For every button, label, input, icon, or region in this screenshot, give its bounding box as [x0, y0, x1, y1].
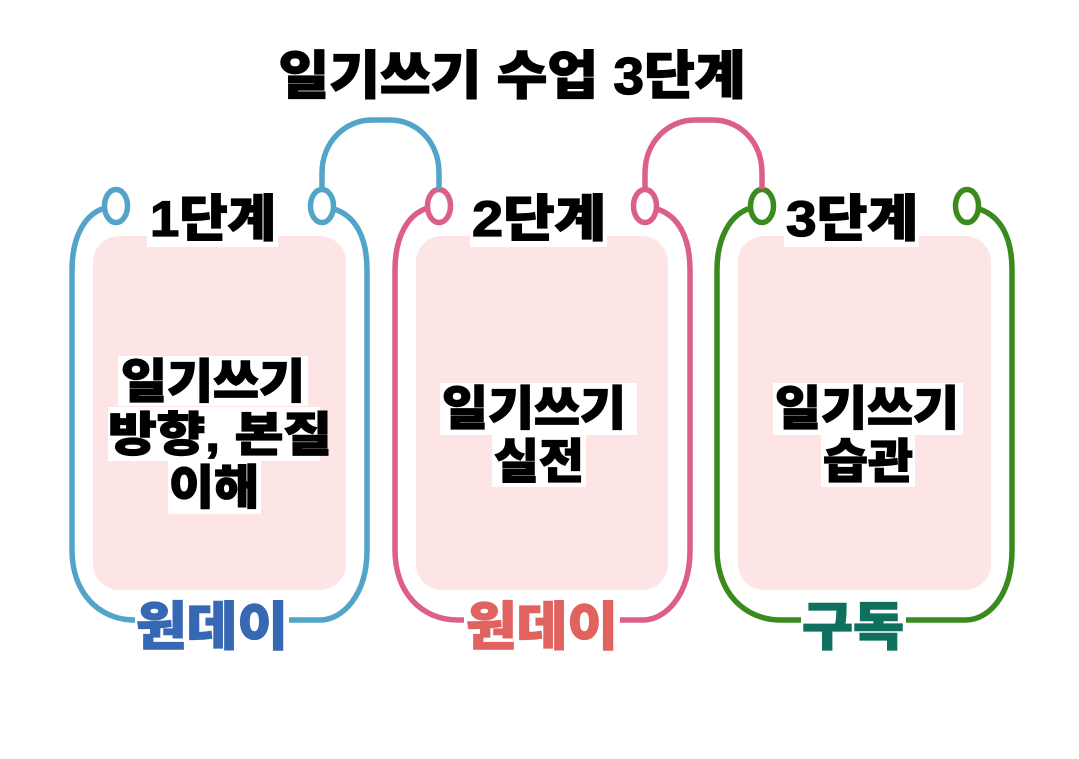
- step 2 body text: [440, 382, 637, 488]
- step 2 right ring: [634, 190, 656, 222]
- step 3 background card: [738, 236, 991, 590]
- arrow: pink connector from step 2 to step 3: [645, 120, 762, 189]
- step 1 body text: 방향, 본질: [108, 408, 332, 461]
- panel: step 2: [395, 190, 690, 657]
- step 1 body text: 일기쓰기: [121, 355, 305, 408]
- step 1 body text: 이해: [169, 461, 259, 514]
- step 3 body text: [773, 382, 963, 488]
- step 1 label: 원데이: [136, 599, 288, 657]
- step 3 body text: 일기쓰기: [775, 382, 959, 435]
- step 2 label: 원데이: [466, 599, 618, 657]
- step 3 right ring: [956, 190, 978, 222]
- step 1 background card: [93, 236, 346, 590]
- step 3 label: 구독: [802, 599, 904, 657]
- step 1 right ring: [310, 190, 334, 222]
- step 3 outline: [717, 208, 1012, 620]
- step 1 left ring: [104, 190, 128, 222]
- step 1 body text: [108, 355, 332, 514]
- step 3 body text: 습관: [823, 435, 913, 488]
- step 2 heading: 2단계: [472, 191, 606, 247]
- arrow: blue connector from step 1 to step 2: [322, 120, 439, 189]
- step 3 left ring: [750, 190, 774, 222]
- step 2 left ring: [428, 190, 450, 222]
- panel: step 3: [717, 190, 1012, 657]
- step 2 body text: 일기쓰기: [442, 382, 626, 435]
- panel: step 1: [72, 190, 367, 657]
- step 2 background card: [416, 236, 668, 590]
- step 1 outline: [72, 208, 367, 620]
- step 3 heading: 3단계: [786, 191, 918, 247]
- step 2 body text: 실전: [494, 435, 584, 488]
- step 1 heading: 1단계: [150, 191, 276, 247]
- title: 일기쓰기 수업 3단계: [278, 48, 746, 106]
- step 2 outline: [395, 208, 690, 620]
